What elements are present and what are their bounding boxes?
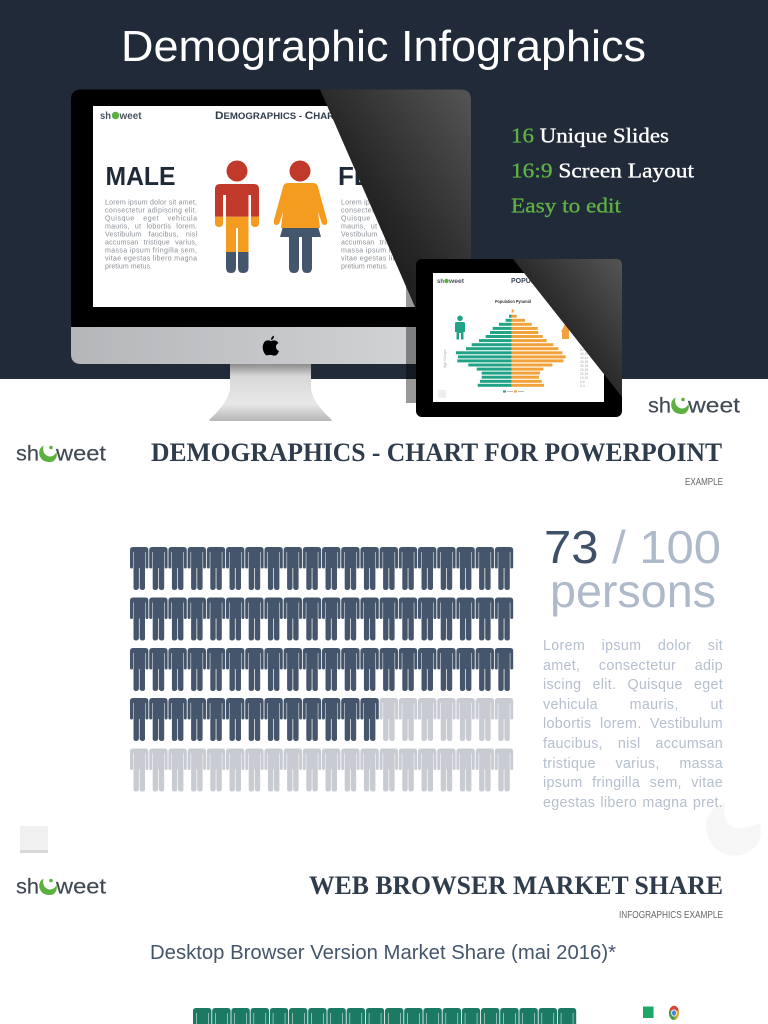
big number: 73 / 100: 73 / 100 [544,521,721,573]
tablet body [416,259,622,417]
chart title: Population Pyramid [495,299,531,304]
showeet logo: browser section: sh [16,876,39,898]
watermark logo [706,803,761,856]
showeet logo: browser section: weet [55,876,106,898]
big label: persons: persons [550,565,716,617]
screen title: DEMOGRAPHICS - CHART [215,110,341,122]
icon: chrome [669,1006,679,1020]
body text paragraph: vehicula mauris, ut [543,697,723,713]
monitor stand [209,364,332,421]
male text: consectetur adipiscing elit. [105,208,197,214]
icon: teal person [455,316,465,340]
male text: mauris, ut lobortis lorem. [105,224,197,230]
monitor chin [71,327,471,364]
monitor bezel [71,90,471,327]
chart title: desktop browser share: Desktop Browser Version Market Share (mai 2016)* [150,942,616,964]
female text: mauris, ut lobortis lorem. [341,224,433,230]
tablet shadow [406,267,418,403]
body text paragraph: iscing elit. Quisque eget [543,677,723,693]
female text: accumsan tristique varius, [341,240,433,246]
legend swatch: green [643,1006,654,1018]
icon: female figure [274,160,327,273]
body text paragraph: tristique varius, massa [543,756,723,772]
female text: Quisque eget vehicula [341,216,433,222]
body text paragraph: ipsum fringilla sem, vitae [543,775,723,791]
screen logo [100,112,142,120]
female text: massa ipsum fringilla sem, [341,248,433,254]
icon: apple logo [263,336,279,356]
male text: vitae egestas libero magna [105,256,197,262]
age labels: 45-49 [580,352,588,356]
female text: Lorem ipsum dolor sit amet, [341,200,433,206]
age labels [580,348,588,388]
female text [341,199,395,270]
tablet mockup [416,259,622,417]
tablet gloss [513,259,622,397]
age labels: 5-9 [580,380,585,384]
MALE heading: MALE [106,161,176,191]
age labels: 0-4 [580,384,585,388]
body text paragraph: faucibus, nisl accumsan [543,736,723,752]
title: Demographic Infographics [121,22,646,71]
desktop monitor mockup [71,90,471,421]
male text: massa ipsum fringilla sem, [105,248,197,254]
showeet logo: top right [648,394,740,418]
male text: pretium metus. [105,264,152,270]
section heading: web browser: WEB BROWSER MARKET SHARE [309,871,723,900]
age labels: 40-44 [580,356,588,360]
tablet screen [433,273,604,402]
body text paragraph: Lorem ipsum dolor sit [543,638,723,654]
tablet logo: sh [437,279,444,285]
FEMALE heading: FEMALE [338,161,445,191]
feature list: 16:9 Screen Layout [511,158,694,182]
showeet logo: top right: weet [687,394,740,418]
axis label: Age Groups [443,349,447,368]
population pyramid chart [456,310,566,387]
monitor gloss [320,90,471,310]
feature list: Easy to edit [511,194,621,218]
showeet logo: demographics section [16,442,106,466]
age labels: 35-39 [580,360,588,364]
female text: Vestibulum faucibus, nisl [341,232,433,238]
male text [105,200,197,270]
showeet logo: demographics section: sh [16,442,39,466]
pictogram chart: 73 of 100 persons [130,547,513,792]
decorative slide marker [20,826,48,853]
male text: Vestibulum faucibus, nisl [105,232,197,238]
body text paragraph [543,638,723,811]
header band [0,0,768,379]
showeet logo: demographics section: weet [55,442,106,466]
age labels: 50-54 [580,348,588,352]
tablet title: POPULATION [511,278,556,285]
male text: Quisque eget vehicula [105,216,197,222]
section heading: demographics: DEMOGRAPHICS - CHART FOR POWERPOINT [151,438,722,467]
male text: Lorem ipsum dolor sit amet, [105,200,197,206]
pictogram row: browser share [193,1008,576,1024]
icon: orange person [561,322,569,339]
tablet logo [437,279,464,285]
section subheading: example: EXAMPLE [685,477,723,488]
tablet logo: weet [448,279,464,285]
female text: vitae egestas libero magna [341,256,433,262]
body text paragraph: egestas libero magna pret. [543,795,723,811]
showeet logo: browser section [16,876,106,898]
age labels: 15-19 [580,376,588,380]
feature list [511,124,694,218]
body text paragraph: amet, consectetur adip [543,658,723,674]
monitor screen [93,106,445,307]
chart legend [503,390,524,392]
section subheading: infographics example: INFOGRAPHICS EXAMPLE [619,910,723,921]
age labels: 20-24 [580,372,588,376]
tablet slide marker [438,390,446,398]
age labels: 25-29 [580,368,588,372]
screen logo: weet [119,111,142,122]
body text paragraph: lobortis lorem. Vestibulum [543,716,723,732]
female text: pretium metus. [341,264,388,270]
icon: male figure [215,160,259,273]
screen logo: sh [100,111,111,122]
age labels: 30-34 [580,364,588,368]
female text: consectetur adipiscing elit. [341,208,433,214]
showeet logo: top right: sh [648,394,671,418]
male text: accumsan tristique varius, [105,240,197,246]
feature list: 16 Unique Slides [511,124,669,148]
